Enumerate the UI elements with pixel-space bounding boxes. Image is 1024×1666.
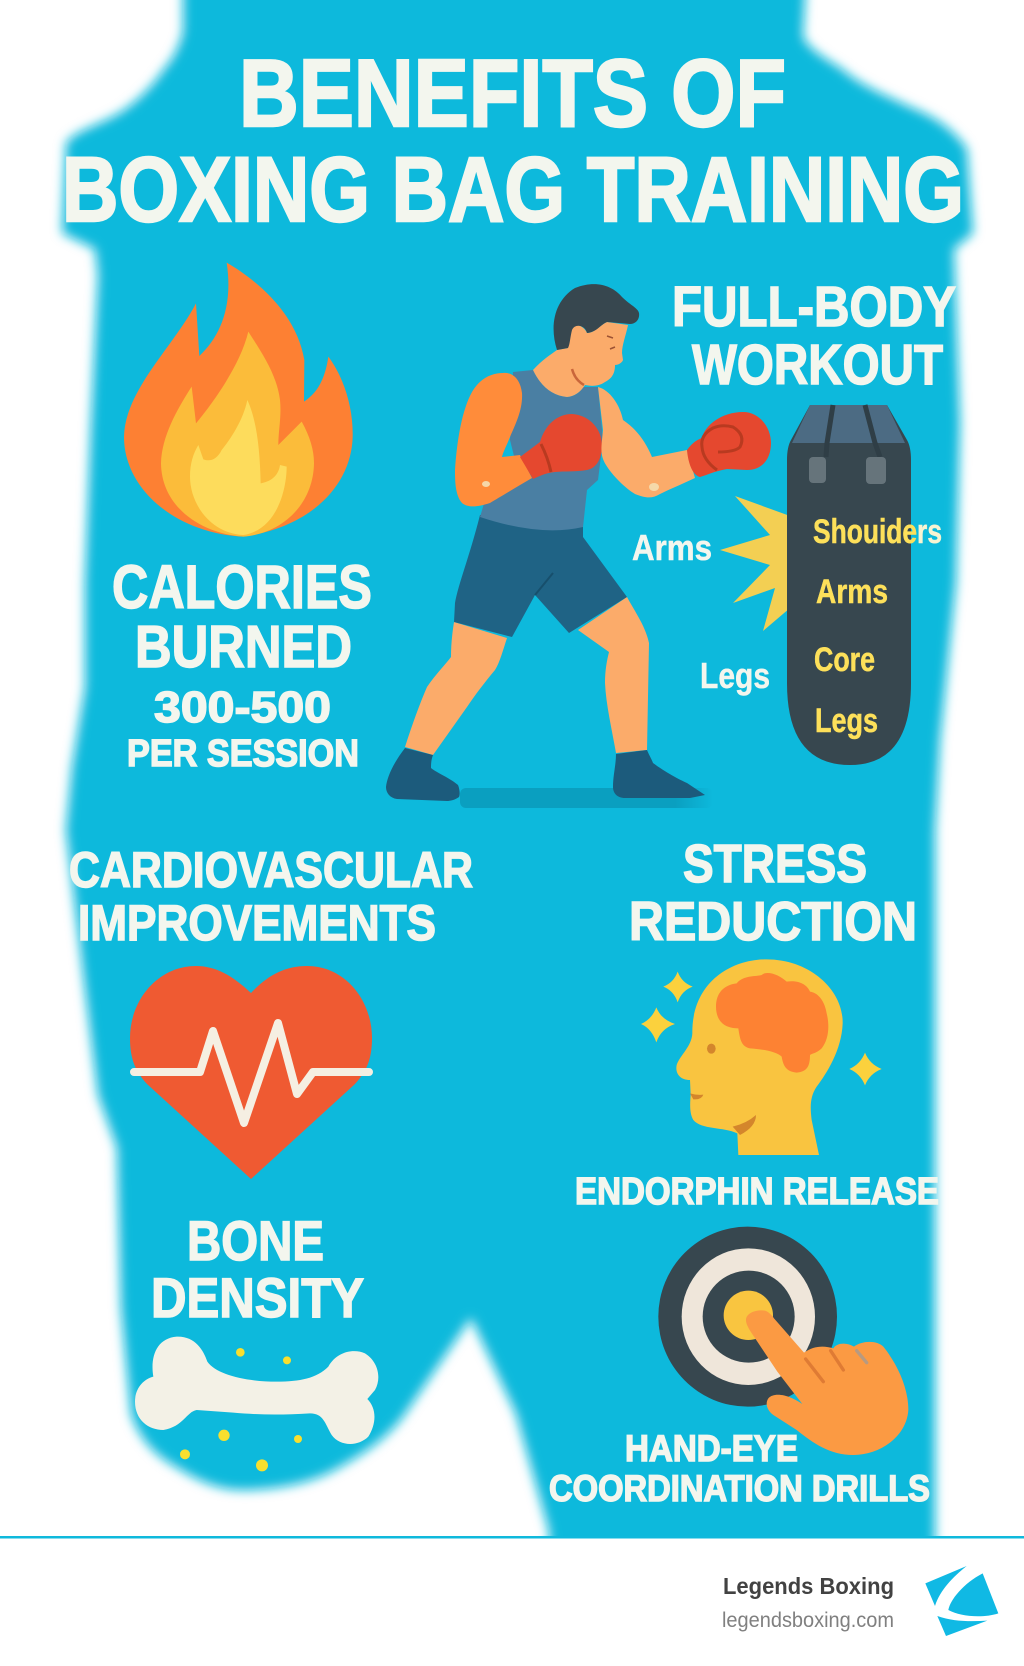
heading: stress reduction: STRESS [683,834,867,894]
stat: 300-500 per session [127,683,359,775]
heading: hand-eye coordination drills: COORDINATION DRILLS [549,1468,930,1509]
stat: 300-500 per session: PER SESSION [127,733,359,775]
heading: bone density [151,1209,364,1329]
heading: hand-eye coordination drills [549,1428,930,1509]
icon: brand logo [925,1566,998,1636]
heading: full-body workout: FULL-BODY [672,275,956,339]
heading: cardiovascular improvements: IMPROVEMENTS [78,895,436,951]
icon: heart with pulse [130,966,372,1179]
icon: punching bag [787,405,911,765]
brand name: Legends Boxing [723,1573,894,1599]
panel: calories burned [112,263,372,775]
title [62,40,964,241]
heading: cardiovascular improvements: CARDIOVASCULAR [69,842,473,898]
heading: stress reduction [629,834,917,952]
bag labels: Shouiders [813,513,942,551]
icon: boxer figure [386,284,771,808]
icon: target with pointing hand [658,1227,908,1455]
icon: bone with dots [135,1337,378,1471]
footer [0,1536,1024,1666]
brand url: legendsboxing.com [722,1609,894,1632]
panel: full-body workout [386,275,956,808]
icon: flame [124,263,353,537]
heading: hand-eye coordination drills: HAND-EYE [625,1428,798,1469]
heading: bone density: DENSITY [151,1266,364,1329]
heading: cardiovascular improvements [69,842,473,951]
panel: bone density [135,1209,378,1471]
stat: 300-500 per session: 300-500 [154,683,331,732]
heading: calories burned: BURNED [135,614,352,680]
icon: impact starburst [720,496,790,631]
heading: calories burned [112,553,372,680]
bag labels: Core [814,641,875,679]
heading: full-body workout: WORKOUT [692,333,943,397]
heading: full-body workout [672,275,956,397]
panel: stress reduction [575,834,939,1213]
heading: calories burned: CALORIES [112,553,372,621]
bag labels [813,513,942,740]
label: endorphin release: ENDORPHIN RELEASE [575,1171,939,1213]
label: arms: Arms [632,527,712,568]
panel: hand-eye coordination [549,1227,930,1509]
icon: head with brain and sparkles [641,959,882,1155]
title: BENEFITS OF [239,40,786,147]
panel: cardiovascular improvements [69,842,473,1179]
bag labels: Arms [816,573,888,611]
bag labels: Legs [815,702,878,740]
heading: bone density: BONE [187,1209,324,1272]
heading: stress reduction: REDUCTION [629,890,917,952]
label: legs: Legs [700,655,770,696]
